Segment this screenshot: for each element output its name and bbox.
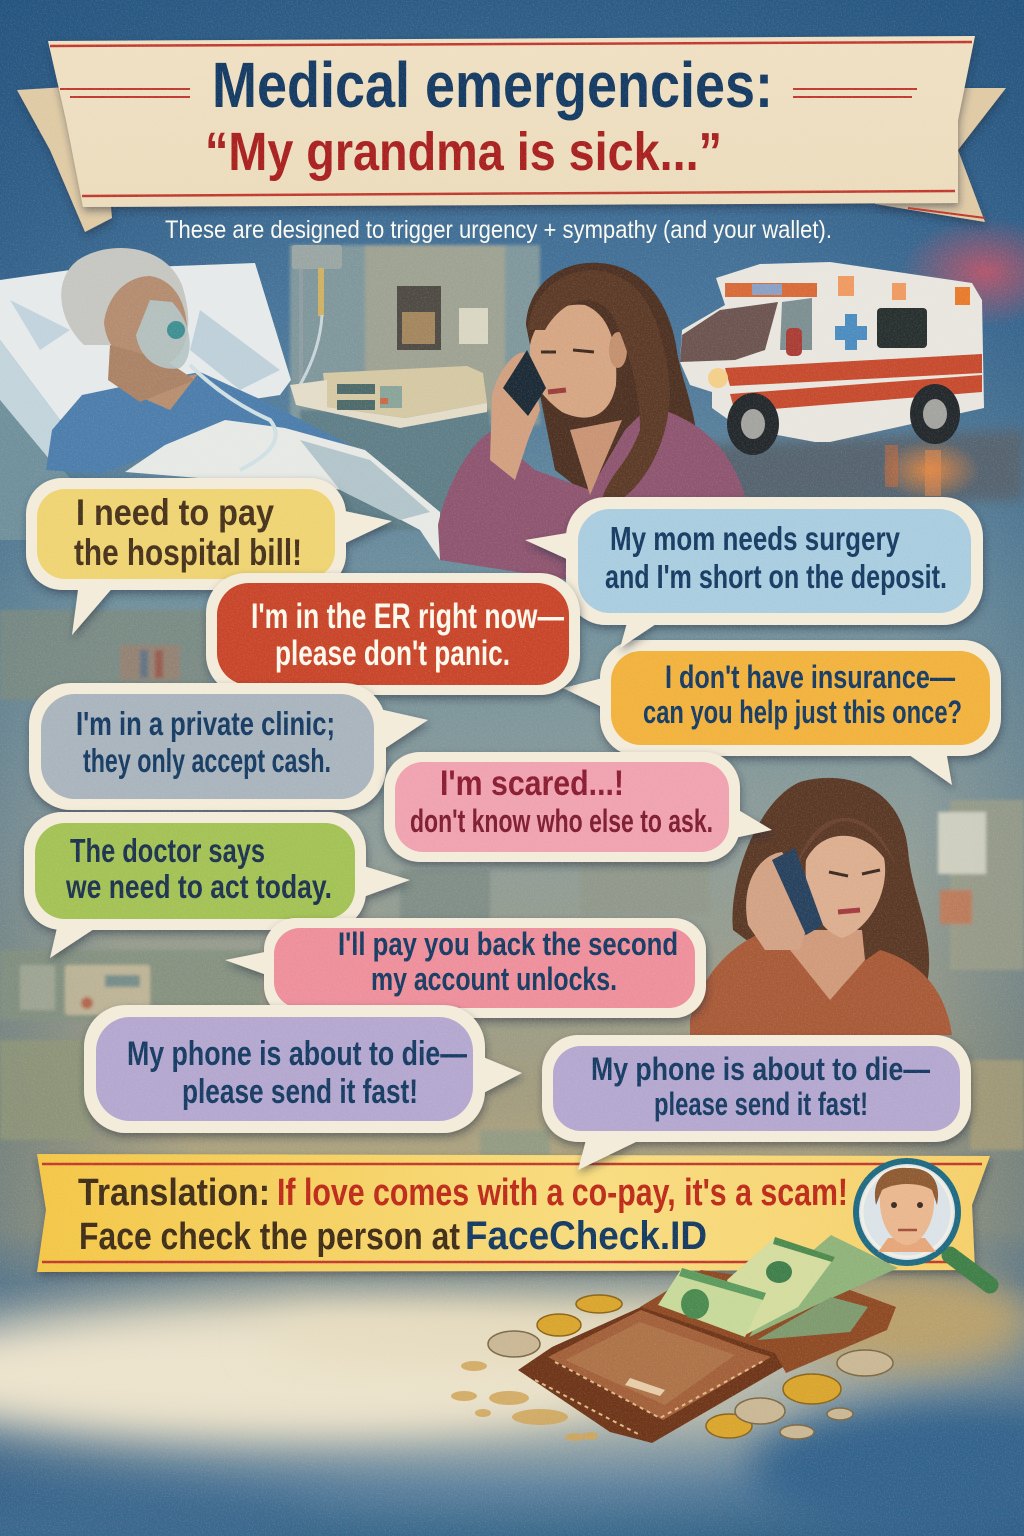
speech bubble: phone about to die left: My phone is about to die— [127,1035,467,1073]
face check line: Face check the person at [79,1216,460,1258]
translation line: Translation: [78,1172,270,1214]
wallet front dark layer [518,1307,783,1443]
lens [856,1161,958,1263]
oxygen mask [136,300,190,369]
phone [503,350,546,416]
speech bubble: scared: don't know who else to ask. [410,803,713,839]
speech bubble: ER: I'm in the ER right now— [251,597,564,636]
wallet stitching [535,1360,765,1435]
speech bubble: doctor: we need to act today. [65,868,332,905]
speech bubble: surgery deposit [525,497,983,648]
face [875,1168,938,1252]
speech bubble: hospital bill: I need to pay [76,492,274,533]
handle [950,1255,990,1285]
ribbon main panel [48,36,975,207]
IV pole [292,245,342,398]
scam warning line: If love comes with a co-pay, it's a scam! [277,1172,848,1214]
speech bubble: scared: I'm scared...! [440,764,624,803]
illustration: ambulance [680,217,1024,505]
wallet front panel [548,1310,771,1420]
speech bubble: phone about to die right: My phone is about to die— [591,1051,930,1087]
speech bubble: ER [206,573,580,695]
speech bubble: scared [384,752,772,862]
windshield [680,302,778,362]
face and neck [104,276,187,368]
hand and phone [746,848,823,950]
speech bubble: phone about to die right [542,1035,971,1170]
roof lights [725,276,970,305]
illustration: young woman on phone [690,778,952,1035]
side mirror [786,328,802,356]
wheels [727,384,960,455]
speech bubble: hospital bill: the hospital bill! [74,532,302,573]
grey hair [61,248,188,345]
speech bubble: private clinic: I'm in a private clinic; [76,705,335,742]
speech bubble: hospital bill [26,478,392,635]
rust sweater [690,930,952,1035]
coin specks [451,1361,598,1441]
title ribbon [17,36,1006,232]
headlight [708,368,728,388]
red stripes [725,354,982,386]
ribbon right tail [875,88,1006,222]
ribbon left tail [17,85,112,232]
oxygen tube [190,365,276,470]
face [806,836,885,938]
title line 1: Medical emergencies: [212,49,773,121]
banknotes [658,1235,898,1340]
speech bubble: surgery deposit: My mom needs surgery [610,520,901,557]
FaceCheck.ID brand: FaceCheck.ID [465,1214,707,1258]
emergency glow [900,217,1024,327]
features [829,870,880,912]
wet road [700,430,1024,505]
wallet highlight [625,1378,665,1396]
blanket [125,420,440,560]
blue cross [835,314,867,350]
ambulance body [680,262,984,442]
ribbon red rules [50,42,985,218]
hand and arm [490,352,540,480]
speech bubble: private clinic: they only accept cash. [83,742,331,779]
speech bubble: pay back [225,918,706,1018]
front hair lock [528,270,670,506]
speech bubble: phone about to die left [84,1005,522,1133]
footer banner [37,1154,990,1272]
speech bubble: pay back: my account unlocks. [371,961,617,997]
gold coins [537,1295,841,1438]
silver coins [488,1331,893,1439]
illustration: grandmother in hospital bed [0,248,440,560]
speech bubble: insurance [563,640,1001,785]
wall notice board [397,286,441,350]
mauve sweater [438,405,752,580]
scene: hospital room wall and equipment [290,245,540,530]
background: hospital room blocks [0,610,1024,1155]
face [530,305,616,418]
speech bubble: phone about to die right: please send it fast! [654,1086,868,1122]
speech bubble: private clinic [29,683,428,810]
back hair [526,263,697,505]
illustration: woman on phone [438,263,752,580]
side window [877,308,927,348]
illustration: wallet with cash and coins [451,1235,898,1443]
speech bubble: insurance: I don't have insurance— [665,659,955,695]
wallet back flap [640,1270,896,1373]
wall paper note [459,308,488,344]
pillow and bed [0,263,291,540]
speech bubble: doctor: The doctor says [70,832,265,869]
title line 2: “My grandma is sick...” [205,122,722,182]
eyes and mouth [541,350,594,392]
front hair [796,818,896,868]
blue gown [46,372,350,474]
banner red rules [42,1164,982,1262]
long hair [732,778,929,990]
speech bubble: phone about to die left: please send it fast! [182,1073,418,1111]
speech bubble: ER: please don't panic. [275,634,510,673]
speech bubble: doctor [24,812,410,958]
subtitle: These are designed to trigger urgency + sympathy (and your wallet). [165,216,832,244]
speech bubble: pay back: I'll pay you back the second [338,926,678,962]
magnifying glass with face [856,1161,990,1285]
medical monitor device [290,366,487,428]
